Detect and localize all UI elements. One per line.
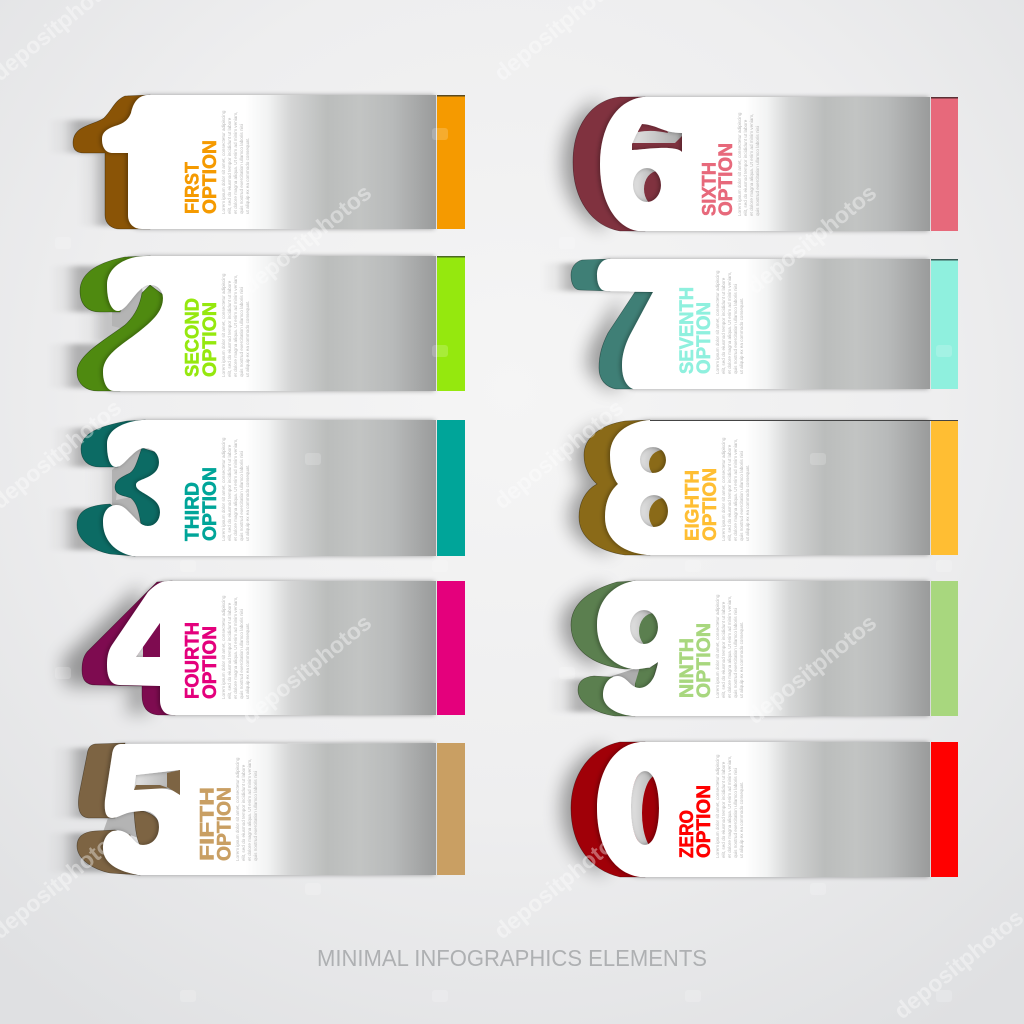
colour bar 7 <box>931 259 958 389</box>
body text 0: quis nostrud exercitation ullamco laboris nisi <box>733 768 738 858</box>
label 0: OPTION <box>694 785 715 858</box>
body text 5: elit, sed do eiusmod tempor incididunt ut labore <box>241 764 246 861</box>
flap: digit 1 <box>73 95 150 229</box>
body text 1: elit, sed do eiusmod tempor incididunt ut labore <box>227 117 232 214</box>
label 1: FIRST <box>182 162 204 214</box>
body text 7: Lorem ipsum dolor sit amet, consectetur adipiscing <box>715 270 720 374</box>
shadow 3 <box>47 428 145 550</box>
label 3: OPTION <box>200 467 221 541</box>
camera watermark icons <box>55 128 952 1002</box>
pocket shade 5 <box>103 810 138 838</box>
label 9: NINTH <box>677 638 698 698</box>
shadow 5 <box>47 748 112 872</box>
title: MINIMAL INFOGRAPHICS ELEMENTS <box>317 945 707 971</box>
label 5 <box>198 787 236 861</box>
label 4 <box>182 622 221 699</box>
colour bar 6 <box>931 97 958 231</box>
white digit 2 card <box>103 256 436 391</box>
hole 8 backing <box>640 446 668 528</box>
card 4: fourth option <box>62 581 465 715</box>
body text 2: ut aliquip ex ea commodo consequat. <box>245 301 250 377</box>
flap: digit 3 <box>77 420 165 556</box>
body text 8: ut aliquip ex ea commodo consequat. <box>745 465 750 541</box>
body text 0: Lorem ipsum dolor sit amet, consectetur adipiscing <box>715 754 720 858</box>
hole 4 flap <box>143 623 160 657</box>
label 9 <box>677 623 715 698</box>
card 8: eighth option <box>569 420 958 555</box>
body text 9 <box>715 594 744 698</box>
white digit 9 card <box>597 581 930 716</box>
colour bar 9 <box>931 581 958 716</box>
watermarks: depositphotos <box>237 179 376 299</box>
body text 0: et dolore magna aliqua. Ut enim ad minim veniam, <box>727 756 732 858</box>
body text 2: elit, sed do eiusmod tempor incididunt ut labore <box>227 280 232 377</box>
label 0: ZERO <box>677 810 698 858</box>
pocket shade 9 <box>612 667 640 690</box>
white digit 6 card <box>600 97 930 231</box>
hole 5 backing <box>134 770 180 795</box>
body text 1: ut aliquip ex ea commodo consequat. <box>245 138 250 214</box>
watermarks: depositphotos <box>489 824 628 944</box>
label 7: OPTION <box>694 302 715 374</box>
card 9: ninth option <box>548 581 958 716</box>
body text 3: quis nostrud exercitation ullamco laboris nisi <box>239 451 244 541</box>
label 7: SEVENTH <box>677 287 698 374</box>
body text 6: Lorem ipsum dolor sit amet, consectetur adipiscing <box>737 112 742 216</box>
body text 5 <box>235 757 258 861</box>
label 6 <box>700 143 737 216</box>
hole 6 backing <box>630 124 684 202</box>
label 5: OPTION <box>214 787 236 861</box>
label 2: SECOND <box>182 298 204 377</box>
body text 7: quis nostrud exercitation ullamco laboris nisi <box>733 284 738 374</box>
watermarks: depositphotos <box>742 179 881 299</box>
hole 9 flap <box>639 613 669 649</box>
hole 4 backing <box>136 623 160 657</box>
hole 6 flap <box>630 122 684 207</box>
white digit 5 card <box>103 743 436 875</box>
label 8: OPTION <box>700 468 721 541</box>
shadow 9 <box>548 585 608 712</box>
card 0: zero option <box>561 742 958 877</box>
label 1 <box>182 140 221 214</box>
label 9: OPTION <box>694 623 715 698</box>
colour bar 1 <box>437 95 465 229</box>
label 3 <box>182 467 221 541</box>
card 5: fifth option <box>47 743 465 875</box>
white digit 0 card <box>597 742 930 877</box>
colour bar 3 <box>437 420 465 556</box>
body text 9: elit, sed do eiusmod tempor incididunt ut labore <box>721 601 726 698</box>
body text 3 <box>221 437 250 541</box>
body text 4 <box>221 595 250 699</box>
body text 0: ut aliquip ex ea commodo consequat. <box>739 782 744 858</box>
flap: digit 0 <box>571 742 645 877</box>
watermarks: depositphotos <box>742 609 881 729</box>
body text 9: ut aliquip ex ea commodo consequat. <box>739 622 744 698</box>
label 6: OPTION <box>716 143 737 216</box>
white digit 7 card <box>597 259 930 389</box>
flap: digit 2 <box>77 256 170 391</box>
label 3: THIRD <box>182 482 204 541</box>
white digit 8 card <box>605 420 930 555</box>
body text 3: et dolore magna aliqua. Ut enim ad minim veniam, <box>233 439 238 541</box>
body text 6: et dolore magna aliqua. Ut enim ad minim veniam, <box>749 114 754 216</box>
body text 7: ut aliquip ex ea commodo consequat. <box>739 298 744 374</box>
body text 0: elit, sed do eiusmod tempor incididunt ut labore <box>721 761 726 858</box>
flap: digit 5 <box>77 743 160 875</box>
hole 0 flap <box>642 775 672 851</box>
card 3: third option <box>47 420 465 556</box>
colour bar 8 <box>931 420 958 555</box>
body text 3: Lorem ipsum dolor sit amet, consectetur adipiscing <box>221 437 226 541</box>
flap: digit 9 <box>571 581 658 716</box>
body text 9: et dolore magna aliqua. Ut enim ad minim veniam, <box>727 596 732 698</box>
body text 7: et dolore magna aliqua. Ut enim ad minim veniam, <box>727 272 732 374</box>
label 0 <box>677 785 715 858</box>
body text 7 <box>715 270 744 374</box>
body text 8: elit, sed do eiusmod tempor incididunt ut labore <box>727 444 732 541</box>
white digit 1 card <box>102 95 436 229</box>
colour bar 5 <box>437 743 465 875</box>
label 6: SIXTH <box>700 162 720 216</box>
card 6: sixth option <box>562 97 958 231</box>
shadow 1 <box>48 120 132 226</box>
body text 4: quis nostrud exercitation ullamco laboris nisi <box>239 609 244 699</box>
colour bar 0 <box>931 742 958 877</box>
pocket shade 2 <box>112 288 144 330</box>
label 5: FIFTH <box>198 787 218 861</box>
hole 8 flap <box>649 450 679 532</box>
hole 0 backing <box>630 770 660 846</box>
body text 0 <box>715 754 744 858</box>
body text 1 <box>221 110 250 214</box>
body text 5: Lorem ipsum dolor sit amet, consectetur adipiscing <box>235 757 240 861</box>
pocket shade 3 <box>112 446 145 526</box>
shadow 4 <box>62 585 150 712</box>
body text 4: Lorem ipsum dolor sit amet, consectetur adipiscing <box>221 595 226 699</box>
body text 1: Lorem ipsum dolor sit amet, consectetur adipiscing <box>221 110 226 214</box>
body text 4: elit, sed do eiusmod tempor incididunt ut labore <box>227 602 232 699</box>
label 8 <box>682 468 721 541</box>
body text 8: Lorem ipsum dolor sit amet, consectetur adipiscing <box>721 437 726 541</box>
body text 9: Lorem ipsum dolor sit amet, consectetur adipiscing <box>715 594 720 698</box>
label 1: OPTION <box>200 140 221 214</box>
body text 4: et dolore magna aliqua. Ut enim ad minim veniam, <box>233 597 238 699</box>
shadow 2 <box>47 266 135 388</box>
flap: digit 7 <box>571 259 653 389</box>
shadow 7 <box>541 263 620 388</box>
body text 2: Lorem ipsum dolor sit amet, consectetur adipiscing <box>221 273 226 377</box>
card 1: first option <box>48 95 465 229</box>
colour bar 2 <box>437 256 465 391</box>
card 7: seventh option <box>541 259 958 389</box>
flap: digit 6 <box>573 97 645 231</box>
body text 2: et dolore magna aliqua. Ut enim ad minim veniam, <box>233 275 238 377</box>
label 2 <box>182 298 221 377</box>
body text 5: quis nostrud exercitation ullamco laboris nisi <box>253 771 258 861</box>
body text 1: et dolore magna aliqua. Ut enim ad minim veniam, <box>233 112 238 214</box>
label 2: OPTION <box>200 302 221 377</box>
body text 2 <box>221 273 250 377</box>
hole 5 flap <box>134 770 180 795</box>
body text 6: quis nostrud exercitation ullamco laboris nisi <box>755 126 760 216</box>
body text 6: elit, sed do eiusmod tempor incididunt ut labore <box>743 119 748 216</box>
white digit 4 card <box>107 581 436 715</box>
body text 1: quis nostrud exercitation ullamco laboris nisi <box>239 124 244 214</box>
body text 3: elit, sed do eiusmod tempor incididunt ut labore <box>227 444 232 541</box>
body text 5: et dolore magna aliqua. Ut enim ad minim veniam, <box>247 759 252 861</box>
shadow 6 <box>562 100 605 230</box>
label 4: FOURTH <box>182 622 204 699</box>
white digit 3 card <box>103 420 436 556</box>
flap: digit 8 <box>579 420 650 555</box>
body text 7: elit, sed do eiusmod tempor incididunt ut labore <box>721 277 726 374</box>
colour bar 4 <box>437 581 465 715</box>
hole 9 backing <box>630 610 658 644</box>
body text 8: et dolore magna aliqua. Ut enim ad minim veniam, <box>733 439 738 541</box>
label 7 <box>677 287 715 374</box>
body text 4: ut aliquip ex ea commodo consequat. <box>245 623 250 699</box>
body text 8: quis nostrud exercitation ullamco laboris nisi <box>739 451 744 541</box>
body text 8 <box>721 437 750 541</box>
shadow 0 <box>561 745 605 875</box>
body text 6 <box>737 112 760 216</box>
body text 3: ut aliquip ex ea commodo consequat. <box>245 465 250 541</box>
flap: digit 4 <box>82 581 175 715</box>
label 8: EIGHTH <box>682 470 704 541</box>
card 2: second option <box>47 256 465 391</box>
watermarks: depositphotos <box>489 394 628 514</box>
shadow 8 <box>569 424 610 553</box>
watermarks: depositphotos <box>237 609 376 729</box>
body text 9: quis nostrud exercitation ullamco laboris nisi <box>733 608 738 698</box>
label 4: OPTION <box>200 626 221 699</box>
body text 2: quis nostrud exercitation ullamco laboris nisi <box>239 287 244 377</box>
top edge line 8 <box>650 420 958 421</box>
